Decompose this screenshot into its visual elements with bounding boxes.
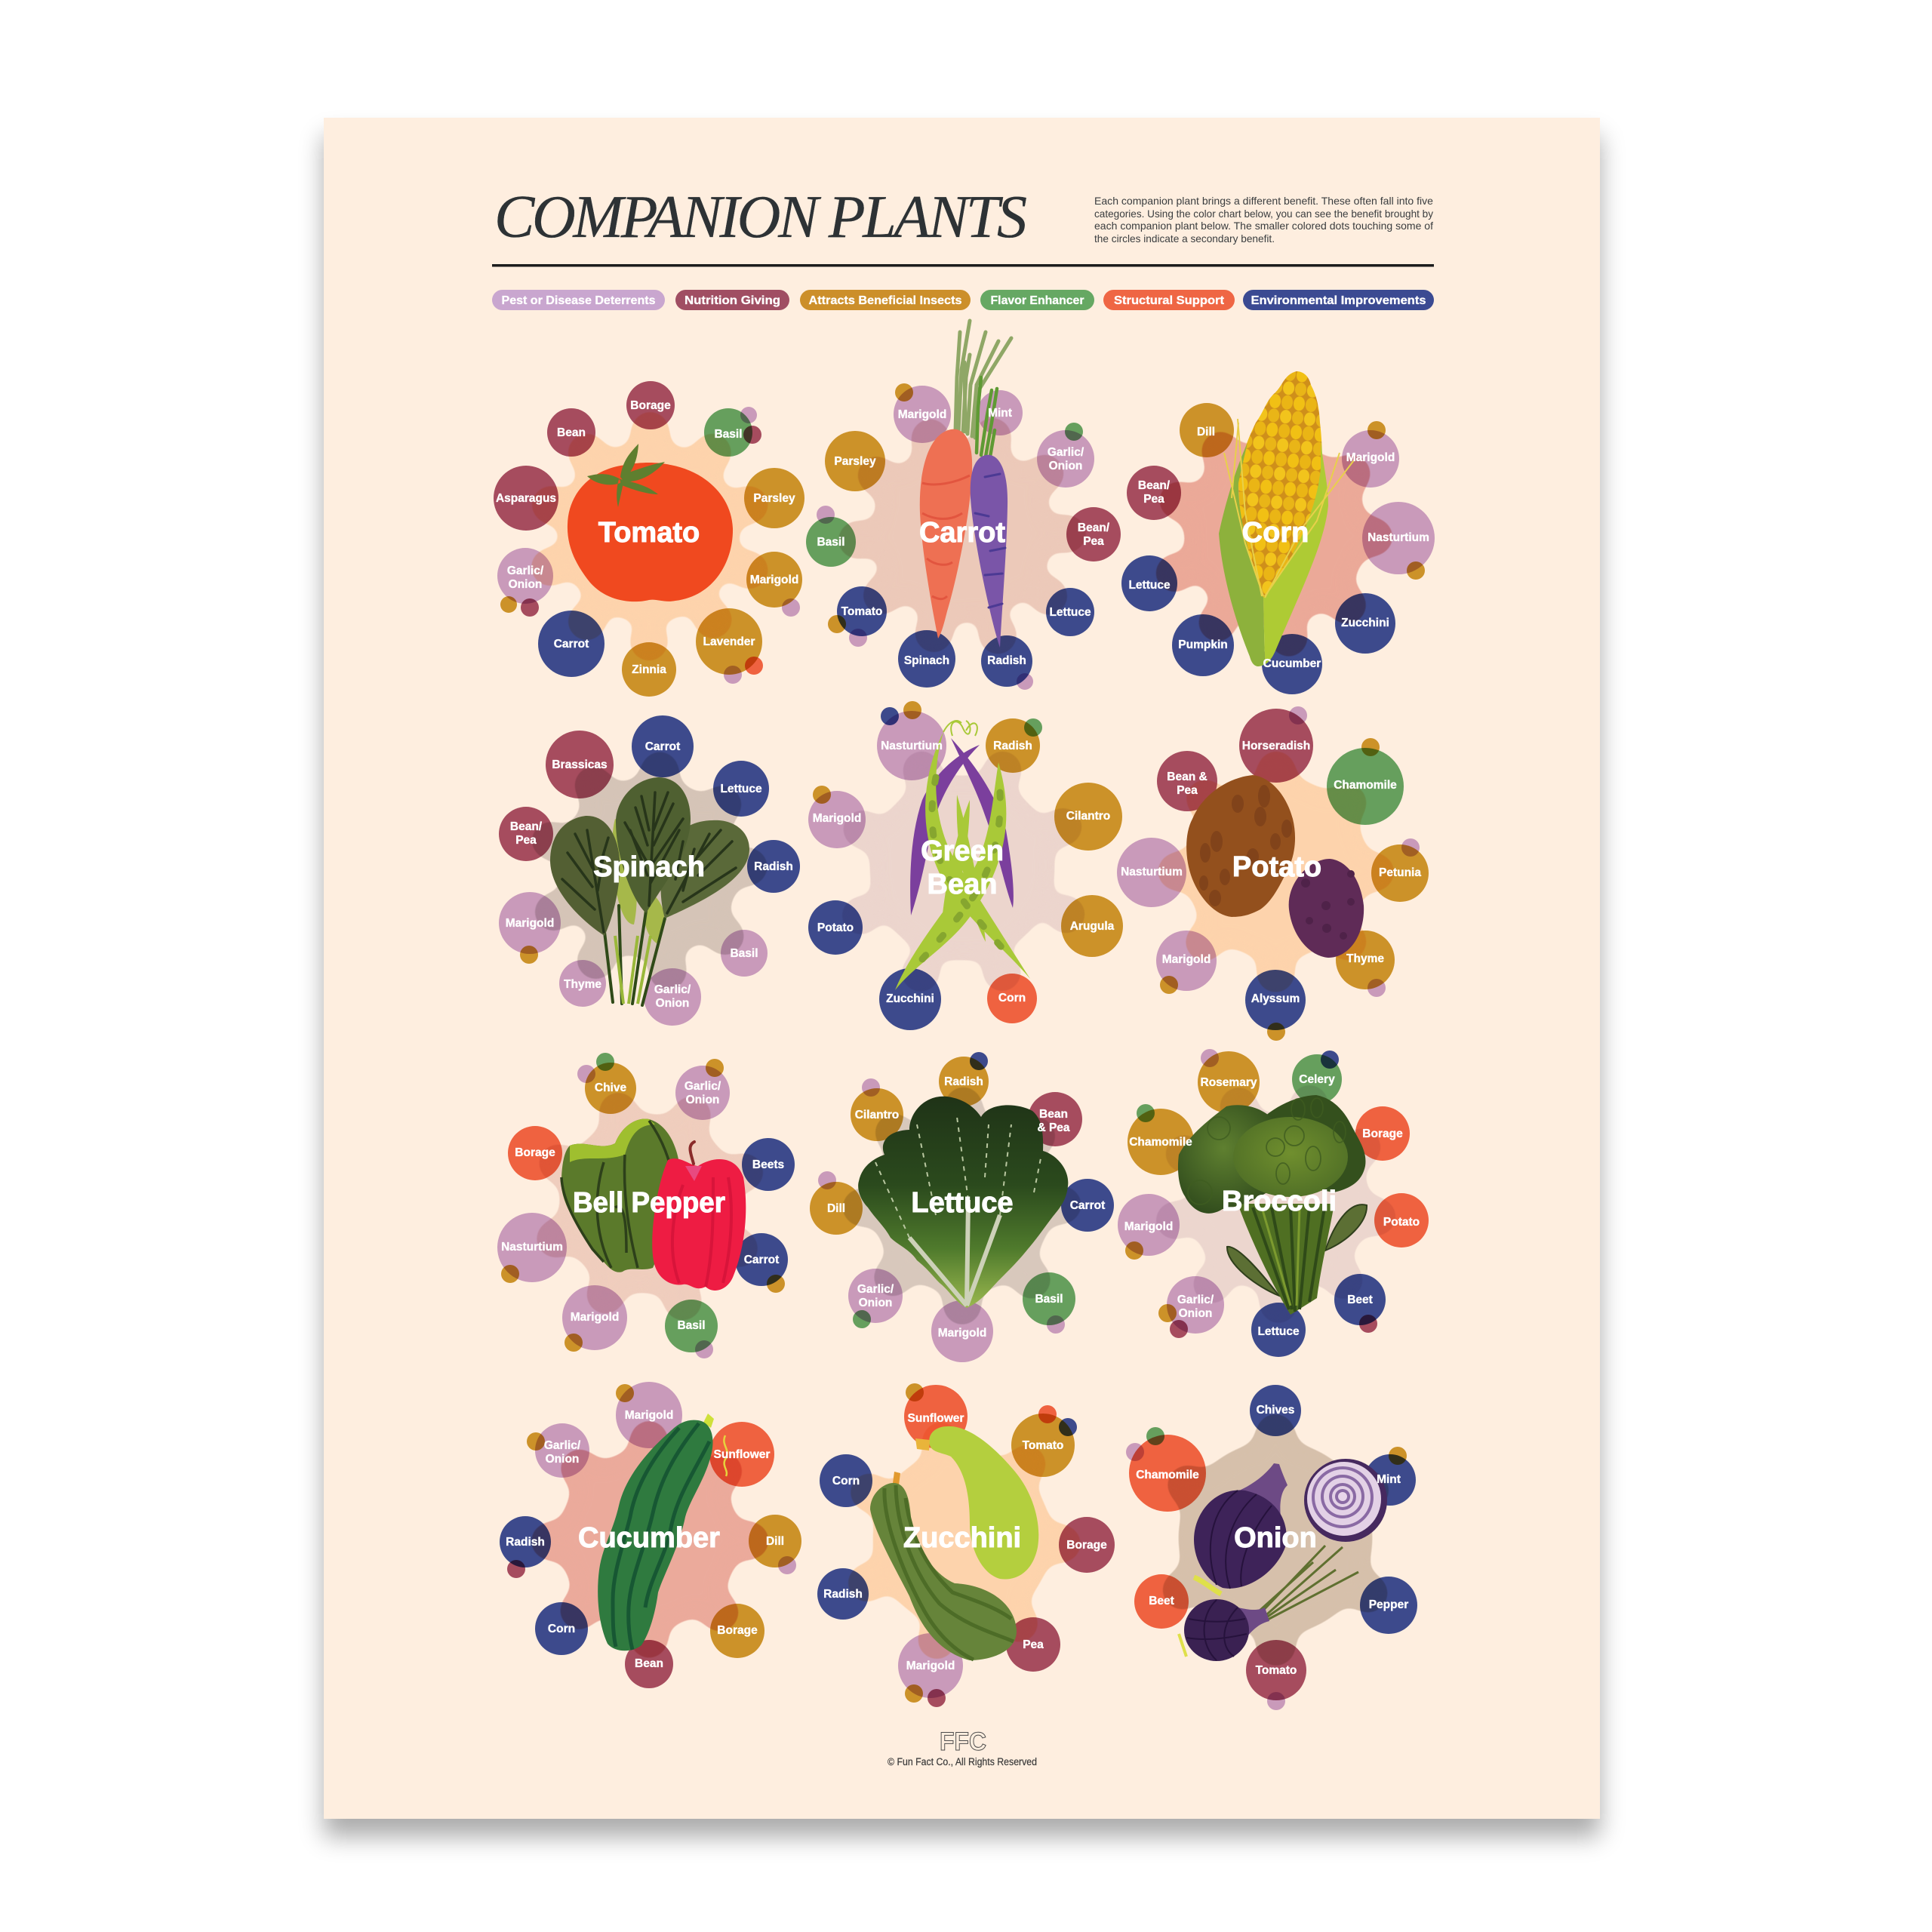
companion labels: Potato [1383, 1216, 1420, 1229]
illustration: carrots [920, 321, 1011, 648]
companion labels [1128, 426, 1429, 670]
plant name: Lettuce [911, 1187, 1014, 1219]
companion labels [1121, 740, 1421, 1005]
companion labels: Marigold [571, 1311, 619, 1324]
companion labels: Onion [686, 1094, 719, 1106]
companion labels: Bean/ [510, 820, 543, 833]
companion labels: Basil [730, 947, 758, 960]
companion labels: Onion [546, 1453, 579, 1466]
companion labels: Corn [832, 1475, 860, 1487]
companion labels: Marigold [906, 1660, 955, 1672]
illustration: corn [1219, 371, 1354, 666]
intro text: the circles indicate a secondary benefit. [1094, 232, 1275, 245]
companion labels: Sunflower [908, 1412, 964, 1425]
companion labels: Nasturtium [1367, 531, 1429, 544]
companion labels [1136, 1404, 1408, 1677]
illustration: bell peppers [561, 1118, 746, 1291]
companion labels: Tomato [841, 605, 882, 618]
companion labels: Corn [548, 1623, 575, 1635]
hub blob [536, 1091, 764, 1321]
hub blob [1161, 1413, 1390, 1667]
companion labels: Bean [1039, 1108, 1068, 1121]
companion labels: Carrot [744, 1254, 779, 1266]
companion labels [501, 1080, 784, 1332]
companion labels: & Pea [1037, 1121, 1070, 1134]
companion labels: Lavender [703, 635, 755, 648]
companion labels: Marigold [750, 574, 798, 586]
illustration: lettuce [858, 1097, 1068, 1308]
companion labels: Beet [1347, 1294, 1373, 1306]
illustration: spinach [550, 777, 749, 1005]
legend: attracts beneficial insects [800, 290, 971, 310]
companion labels: Lettuce [1257, 1325, 1300, 1338]
companion labels: Carrot [1070, 1199, 1105, 1212]
companion labels: Bean/ [1138, 479, 1171, 492]
plant name: Spinach [593, 851, 705, 883]
companion labels: Rosemary [1201, 1076, 1257, 1089]
companion labels: Horseradish [1242, 740, 1310, 752]
companion labels: Radish [993, 740, 1032, 752]
companion labels: Bean/ [1078, 521, 1110, 534]
plant name: Green [921, 835, 1004, 867]
companion circles [497, 1053, 795, 1358]
plant name: Bell Pepper [573, 1187, 725, 1219]
companion labels: Bean & [1167, 771, 1208, 783]
companion labels: Cucumber [1263, 657, 1321, 670]
companion labels: Borage [515, 1146, 555, 1159]
hub blob [531, 751, 768, 991]
companion labels: Basil [677, 1319, 706, 1332]
companion labels: Garlic/ [857, 1283, 894, 1296]
companion labels: Onion [509, 578, 542, 591]
intro text [1094, 195, 1433, 245]
companion labels: Chives [1257, 1404, 1294, 1417]
panel: green bean [808, 701, 1123, 1030]
companion labels: Garlic/ [685, 1080, 721, 1093]
plant name: Zucchini [903, 1522, 1021, 1554]
intro text: categories. Using the color chart below, you can see the benefit brought by [1094, 208, 1433, 220]
companion circles [808, 701, 1123, 1030]
companion labels [813, 740, 1115, 1005]
companion labels: Carrot [554, 638, 589, 651]
companion labels: Borage [1362, 1128, 1403, 1140]
companion labels [496, 399, 798, 676]
companion labels: Borage [1066, 1539, 1107, 1552]
panel: spinach [499, 715, 800, 1026]
companion labels: Pea [1143, 493, 1164, 506]
companion labels: Radish [754, 860, 793, 873]
companion labels: Chamomile [1129, 1136, 1192, 1149]
legend: pest or disease deterrents [492, 290, 665, 310]
hub blob [1155, 1084, 1397, 1324]
companion labels: Lettuce [1049, 606, 1091, 619]
intro text: Each companion plant brings a different benefit. These often fall into five [1094, 195, 1433, 207]
legend: structural support: Structural Support [1114, 294, 1225, 307]
companion labels: Parsley [834, 455, 876, 468]
companion labels: Mint [1377, 1473, 1401, 1486]
companion labels: Dill [827, 1202, 845, 1215]
companion labels: Onion [1179, 1307, 1212, 1320]
legend: environmental improvements: Environmental Improvements [1251, 294, 1426, 307]
companion labels: Thyme [1346, 952, 1384, 965]
copyright: © Fun Fact Co., All Rights Reserved [888, 1756, 1037, 1767]
panel: tomato [494, 381, 804, 697]
companion labels: Thyme [564, 978, 601, 991]
companion labels: Onion [656, 997, 689, 1010]
illustration: broccoli [1178, 1095, 1367, 1315]
companion labels: Marigold [506, 917, 554, 930]
companion labels [817, 407, 1110, 667]
companion labels: Pea [1083, 535, 1104, 548]
companion labels: Marigold [1162, 953, 1211, 966]
poster background [324, 118, 1600, 1819]
hub blob [837, 417, 1088, 655]
companion labels: Beet [1149, 1595, 1174, 1607]
companion circles [810, 1052, 1114, 1362]
companion labels: Pepper [1369, 1598, 1408, 1611]
companion labels: Radish [987, 654, 1026, 667]
companion labels: Garlic/ [654, 983, 691, 996]
companion labels: Onion [859, 1297, 892, 1309]
companion labels: Pumpkin [1178, 638, 1228, 651]
companion labels: Lettuce [1128, 579, 1171, 592]
companion labels: Parsley [753, 492, 795, 505]
companion labels: Borage [630, 399, 671, 412]
companion labels: Chamomile [1334, 779, 1397, 792]
companion labels: Lettuce [720, 783, 762, 795]
companion labels: Tomato [1023, 1439, 1063, 1452]
companion labels: Mint [988, 407, 1012, 420]
legend: flavor enhancer [980, 290, 1094, 310]
companion labels: Radish [944, 1075, 983, 1088]
companion labels: Cilantro [855, 1109, 899, 1121]
panel: broccoli [1118, 1049, 1429, 1357]
panel: bell pepper [497, 1053, 795, 1358]
hub blob [847, 1421, 1081, 1660]
plant name: Carrot [919, 517, 1005, 549]
companion labels: Corn [998, 992, 1026, 1004]
hub blob [841, 1086, 1082, 1326]
companion circles [1118, 1049, 1429, 1357]
companion labels: Sunflower [714, 1448, 770, 1461]
companion labels: Marigold [1346, 451, 1395, 464]
legend: nutrition giving: Nutrition Giving [685, 294, 780, 307]
companion labels: Garlic/ [507, 565, 544, 577]
intro text: each companion plant below. The smaller colored dots touching some of [1094, 220, 1433, 232]
companion labels: Marigold [898, 408, 946, 421]
legend: structural support [1103, 290, 1235, 310]
companion labels: Basil [1035, 1293, 1063, 1306]
companion circles [817, 1383, 1115, 1707]
plant name: Onion [1234, 1522, 1317, 1554]
companion labels: Marigold [938, 1327, 986, 1340]
legend: attracts beneficial insects: Attracts Beneficial Insects [809, 294, 962, 307]
companion labels: Garlic/ [544, 1439, 581, 1452]
companion labels: Marigold [1124, 1220, 1173, 1233]
companion circles [1117, 706, 1429, 1041]
companion labels: Basil [714, 428, 743, 441]
companion labels: Radish [506, 1536, 545, 1549]
hub blob [841, 750, 1086, 993]
companion labels: Bean [557, 426, 586, 439]
legend [492, 290, 1434, 310]
companion labels: Arugula [1070, 920, 1115, 933]
panel: lettuce [810, 1052, 1114, 1362]
companion labels: Pea [1023, 1638, 1044, 1651]
companion labels: Asparagus [496, 492, 556, 505]
legend: nutrition giving [675, 290, 789, 310]
panel: potato [1117, 706, 1429, 1041]
legend: flavor enhancer: Flavor Enhancer [990, 294, 1084, 307]
hub blob [530, 411, 769, 662]
companion labels: Tomato [1256, 1664, 1297, 1677]
companion labels: Bean [635, 1657, 663, 1670]
illustration: green beans [895, 721, 1030, 990]
companion labels [1124, 1073, 1420, 1338]
header [492, 184, 1434, 267]
companion labels: Chive [595, 1081, 626, 1094]
companion labels: Chamomile [1136, 1469, 1199, 1481]
plant name: Tomato [598, 517, 700, 549]
title: COMPANION PLANTS [494, 184, 1027, 251]
companion labels: Brassicas [552, 758, 608, 771]
companion labels: Zinnia [632, 663, 666, 676]
companion labels: Marigold [625, 1409, 673, 1422]
companion labels [823, 1412, 1107, 1672]
companion labels: Nasturtium [1121, 866, 1183, 878]
companion labels [506, 1409, 784, 1670]
companion circles [1126, 1385, 1417, 1710]
companion labels: Petunia [1379, 866, 1421, 879]
companion labels: Cilantro [1066, 810, 1110, 823]
companion labels: Celery [1299, 1073, 1335, 1086]
companion labels [506, 740, 793, 1010]
legend: pest or disease deterrents: Pest or Disease Deterrents [501, 294, 656, 307]
illustration: potatoes [1186, 775, 1364, 958]
companion labels: Dill [1197, 426, 1215, 438]
plant name: Cucumber [578, 1522, 720, 1554]
companion labels: Borage [717, 1624, 758, 1637]
panel: corn [1121, 371, 1435, 694]
companion labels: Zucchini [1341, 617, 1389, 629]
companion circles [494, 381, 804, 697]
plant name: Corn [1242, 517, 1309, 549]
illustration: onions [1179, 1459, 1387, 1661]
companion labels: Nasturtium [881, 740, 943, 752]
legend: environmental improvements [1243, 290, 1434, 310]
companion labels: Alyssum [1251, 992, 1300, 1005]
companion labels: Onion [1049, 460, 1082, 472]
companion circles [1121, 403, 1435, 694]
companion labels: Basil [817, 536, 845, 549]
companion labels: Pea [515, 834, 537, 847]
illustration: cucumber [598, 1414, 728, 1651]
companion labels: Garlic/ [1177, 1294, 1214, 1306]
companion labels: Spinach [904, 654, 949, 667]
plant name: Bean [928, 869, 997, 900]
panel: carrot [806, 321, 1121, 690]
companion labels [827, 1075, 1105, 1340]
companion labels: Carrot [645, 740, 680, 753]
companion labels: Radish [823, 1588, 863, 1601]
panel: zucchini [817, 1383, 1115, 1707]
companion labels: Dill [766, 1535, 784, 1548]
footer logo: FFC [940, 1727, 986, 1756]
companion labels: Beets [752, 1158, 784, 1171]
companion labels: Pea [1177, 784, 1198, 797]
companion circles [499, 715, 800, 1026]
panel: cucumber [500, 1382, 801, 1688]
plant name [921, 835, 1004, 900]
illustration: zucchini [870, 1426, 1038, 1660]
companion labels: Garlic/ [1048, 446, 1084, 459]
companion labels: Zucchini [886, 992, 934, 1005]
hub blob [1155, 431, 1394, 657]
companion labels: Marigold [813, 812, 861, 825]
companion labels: Nasturtium [501, 1241, 563, 1254]
plant name: Broccoli [1222, 1186, 1337, 1217]
panel: onion [1126, 1385, 1417, 1710]
companion circles [806, 383, 1121, 690]
hub blob [1157, 750, 1395, 993]
companion circles [500, 1382, 801, 1688]
companion labels: Potato [817, 921, 854, 934]
plant name: Potato [1232, 851, 1321, 883]
hub blob [530, 1420, 770, 1659]
illustration: tomato [568, 444, 733, 601]
